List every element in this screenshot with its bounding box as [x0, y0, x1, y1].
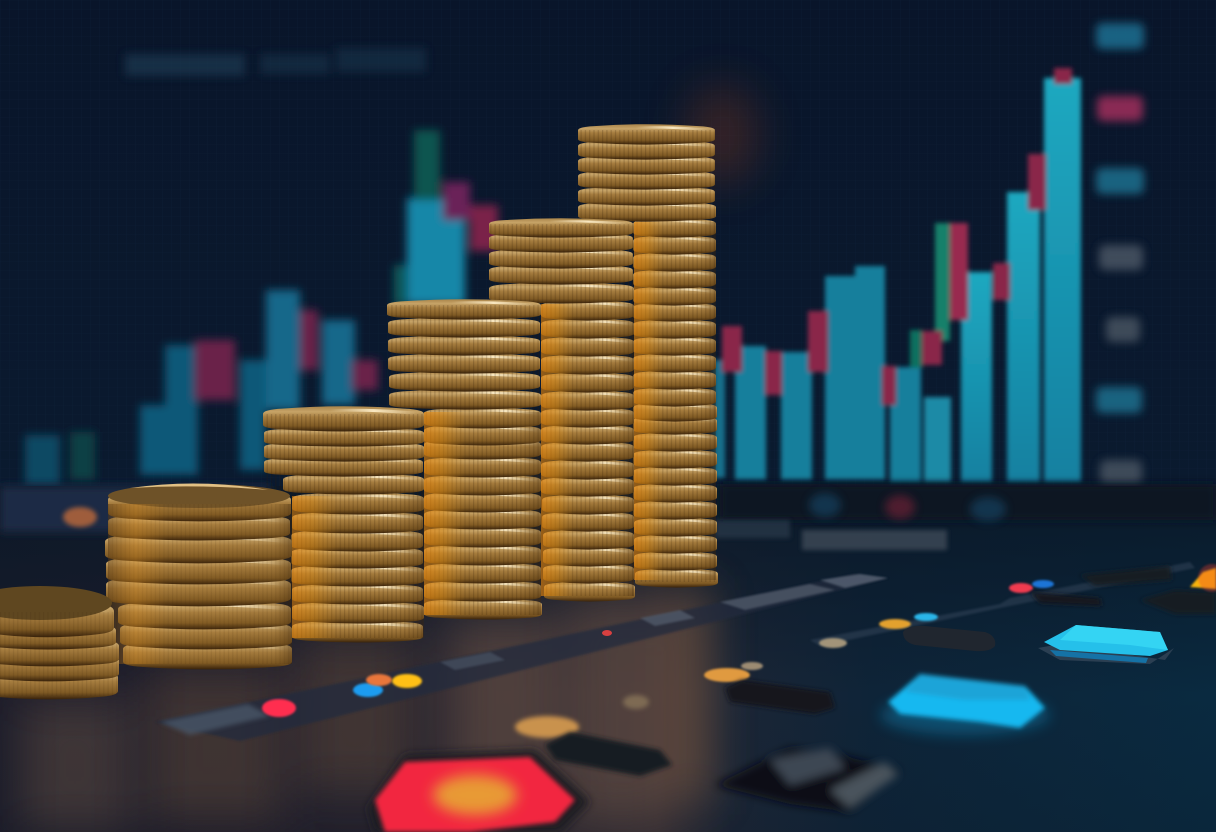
table surface	[0, 484, 1216, 832]
dark keys	[545, 566, 1216, 812]
corner glowing key	[1190, 564, 1216, 592]
coin stack 6: tallest	[578, 124, 718, 588]
coin face: stack 1 top	[0, 586, 112, 620]
dashboard strip with indicator lights	[155, 574, 888, 741]
coin stack 1: front left	[0, 586, 119, 699]
coin stack 4	[387, 299, 542, 620]
coin stack 5	[489, 218, 635, 602]
candlestick chart right	[714, 68, 1081, 482]
coin stack 3	[263, 406, 424, 643]
red glowing button	[368, 750, 590, 832]
small coloured keys and strip	[515, 562, 1195, 738]
coin stack 2	[105, 483, 292, 669]
cyan glowing button far	[1038, 625, 1174, 664]
blurred chart title	[125, 48, 426, 76]
cyan glowing button near	[880, 674, 1050, 735]
blurred axis labels	[1096, 23, 1144, 485]
coin reflections on the table	[20, 590, 710, 830]
coin face: stack 2 top	[108, 483, 290, 508]
candlestick chart left	[25, 130, 498, 485]
